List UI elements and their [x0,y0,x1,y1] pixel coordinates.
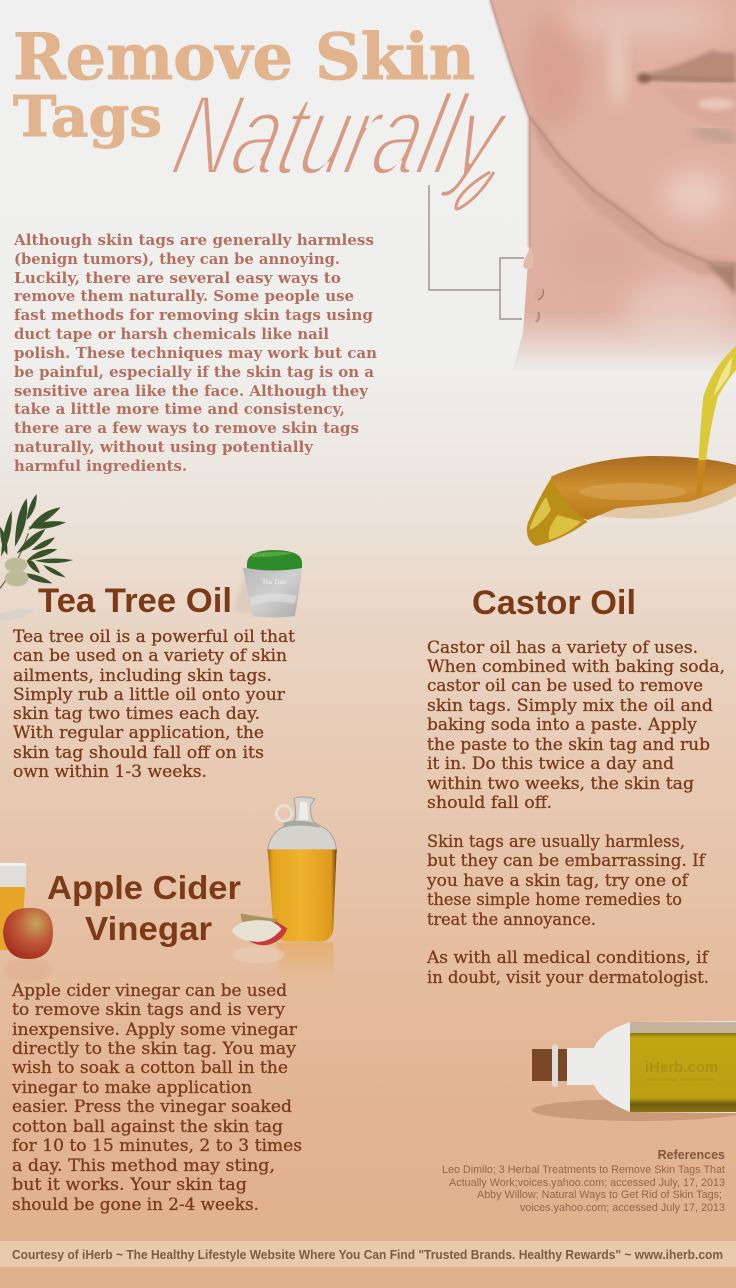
intro paragraph: fast methods for removing skin tags using [14,306,374,324]
heading: Apple Cider Vinegar: Apple Cider [47,869,241,906]
intro paragraph: polish. These techniques may work but can [14,344,377,362]
references: voices.yahoo.com; accessed July 17, 2013 [520,1202,725,1214]
text: apple cider vinegar [11,981,302,1214]
text: tea tree oil: ailments, including skin tags. [13,666,272,685]
text: tea tree oil: skin tag should fall off on its [13,743,264,762]
text: apple cider vinegar: directly to the skin tag. You may [12,1039,297,1058]
text: tea tree oil [13,627,295,781]
text: castor oil: castor oil can be used to remove [427,676,703,695]
intro paragraph: (benign tumors), they can be annoying. [14,250,340,268]
text: castor oil: should fall off. [427,793,552,812]
references: References [658,1148,725,1162]
text: castor oil: skin tags. Simply mix the oil and [427,696,713,715]
image: glass of vinegar and apple [0,863,53,982]
title: Remove Skin Tags: Tags [13,84,162,150]
image: oil pouring on spoon [527,346,736,546]
text: castor oil: you have a skin tag, try one of [426,871,690,890]
intro paragraph: Luckily, there are several easy ways to [14,269,341,287]
text: apple cider vinegar: but it works. Your skin tag [12,1175,247,1194]
text: castor oil: but they can be embarrassing. If [427,851,707,870]
references: Leo Dimilo; 3 Herbal Treatments to Remove Skin Tags That [442,1164,725,1176]
text: tea tree oil: can be used on a variety of skin [13,646,287,665]
footer band [0,1241,736,1267]
intro paragraph: naturally, without using potentially [14,438,314,456]
text: castor oil: these simple home remedies to [427,890,682,909]
intro paragraph: be painful, especially if the skin tag is on a [14,363,374,381]
text: castor oil: Castor oil has a variety of uses. [427,638,698,657]
intro paragraph [13,231,377,475]
text: castor oil: within two weeks, the skin tag [427,774,694,793]
text: apple cider vinegar: vinegar to make application [11,1078,252,1097]
intro paragraph: there are a few ways to remove skin tags [14,419,359,437]
text: apple cider vinegar: to remove skin tags and is very [12,1000,286,1019]
heading: Castor Oil: Castor Oil [472,584,636,622]
skin tags [523,247,533,269]
intro paragraph: Although skin tags are generally harmless [13,231,374,249]
title: Naturally script: Naturally [162,71,520,199]
text: tea tree oil: skin tag two times each day. [13,704,260,723]
heading: Apple Cider Vinegar: Vinegar [85,910,212,947]
image: vinegar jug and apple slice [232,797,337,985]
text: castor oil: When combined with baking soda, [427,657,725,676]
text: tea tree oil: own within 1-3 weeks. [13,762,207,781]
text: castor oil: baking soda into a paste. Apply [427,715,698,734]
text: castor oil: the paste to the skin tag and rub [427,735,710,754]
intro paragraph: remove them naturally. Some people use [14,287,354,305]
text: tea tree oil: Tea tree oil is a powerful oil that [13,627,295,646]
photo: neck with skin tags [488,0,736,366]
title: Remove Skin Tags: Remove Skin [13,20,475,95]
text: tea tree oil: With regular application, the [13,723,264,742]
intro paragraph: harmful ingredients. [14,457,187,475]
text: apple cider vinegar: cotton ball against the skin tag [12,1117,283,1136]
text: apple cider vinegar: should be gone in 2-4 weeks. [12,1195,259,1214]
references [442,1148,725,1214]
text: castor oil: treat the annoyance. [427,910,596,929]
text: castor oil: Skin tags are usually harmless, [427,832,685,851]
image: tea tree sprig [0,494,73,621]
text: apple cider vinegar: inexpensive. Apply some vinegar [12,1020,297,1039]
image: tea tree jar: Tea Tree [262,578,286,586]
image: olive oil bottle [532,1021,736,1121]
text: tea tree oil: Simply rub a little oil onto your [13,685,285,704]
text: castor oil: As with all medical conditions, if [426,948,710,967]
text: castor oil [426,638,725,987]
pointer lines to skin tags [429,185,524,319]
text: apple cider vinegar: easier. Press the vinegar soaked [12,1097,292,1116]
text: apple cider vinegar: for 10 to 15 minutes, 2 to 3 times [12,1136,302,1155]
intro paragraph: take a little more time and consistency, [14,400,345,418]
image: tea tree jar [232,550,302,618]
text: castor oil: in doubt, visit your dermatologist. [427,968,709,987]
title: Remove Skin Tags [13,20,475,150]
image: olive oil bottle: Trusted Brands. Healthy Rewards [646,1077,715,1082]
text: apple cider vinegar: Apple cider vinegar can be used [11,981,287,1000]
heading: Tea Tree Oil: Tea Tree Oil [38,582,232,620]
heading: Apple Cider Vinegar [47,869,241,947]
text: apple cider vinegar: a day. This method may sting, [12,1156,275,1175]
intro paragraph: sensitive area like the face. Although they [14,382,369,400]
intro paragraph: duct tape or harsh chemicals like nail [14,325,329,343]
image: olive oil bottle: iHerb.com [645,1059,718,1076]
references: Actually Work;voices.yahoo.com; accessed July, 17, 2013 [449,1177,725,1189]
text: castor oil: it in. Do this twice a day and [427,754,674,773]
references: Abby Willow; Natural Ways to Get Rid of Skin Tags; [477,1189,722,1201]
text: apple cider vinegar: wish to soak a cotton ball in the [12,1058,288,1077]
